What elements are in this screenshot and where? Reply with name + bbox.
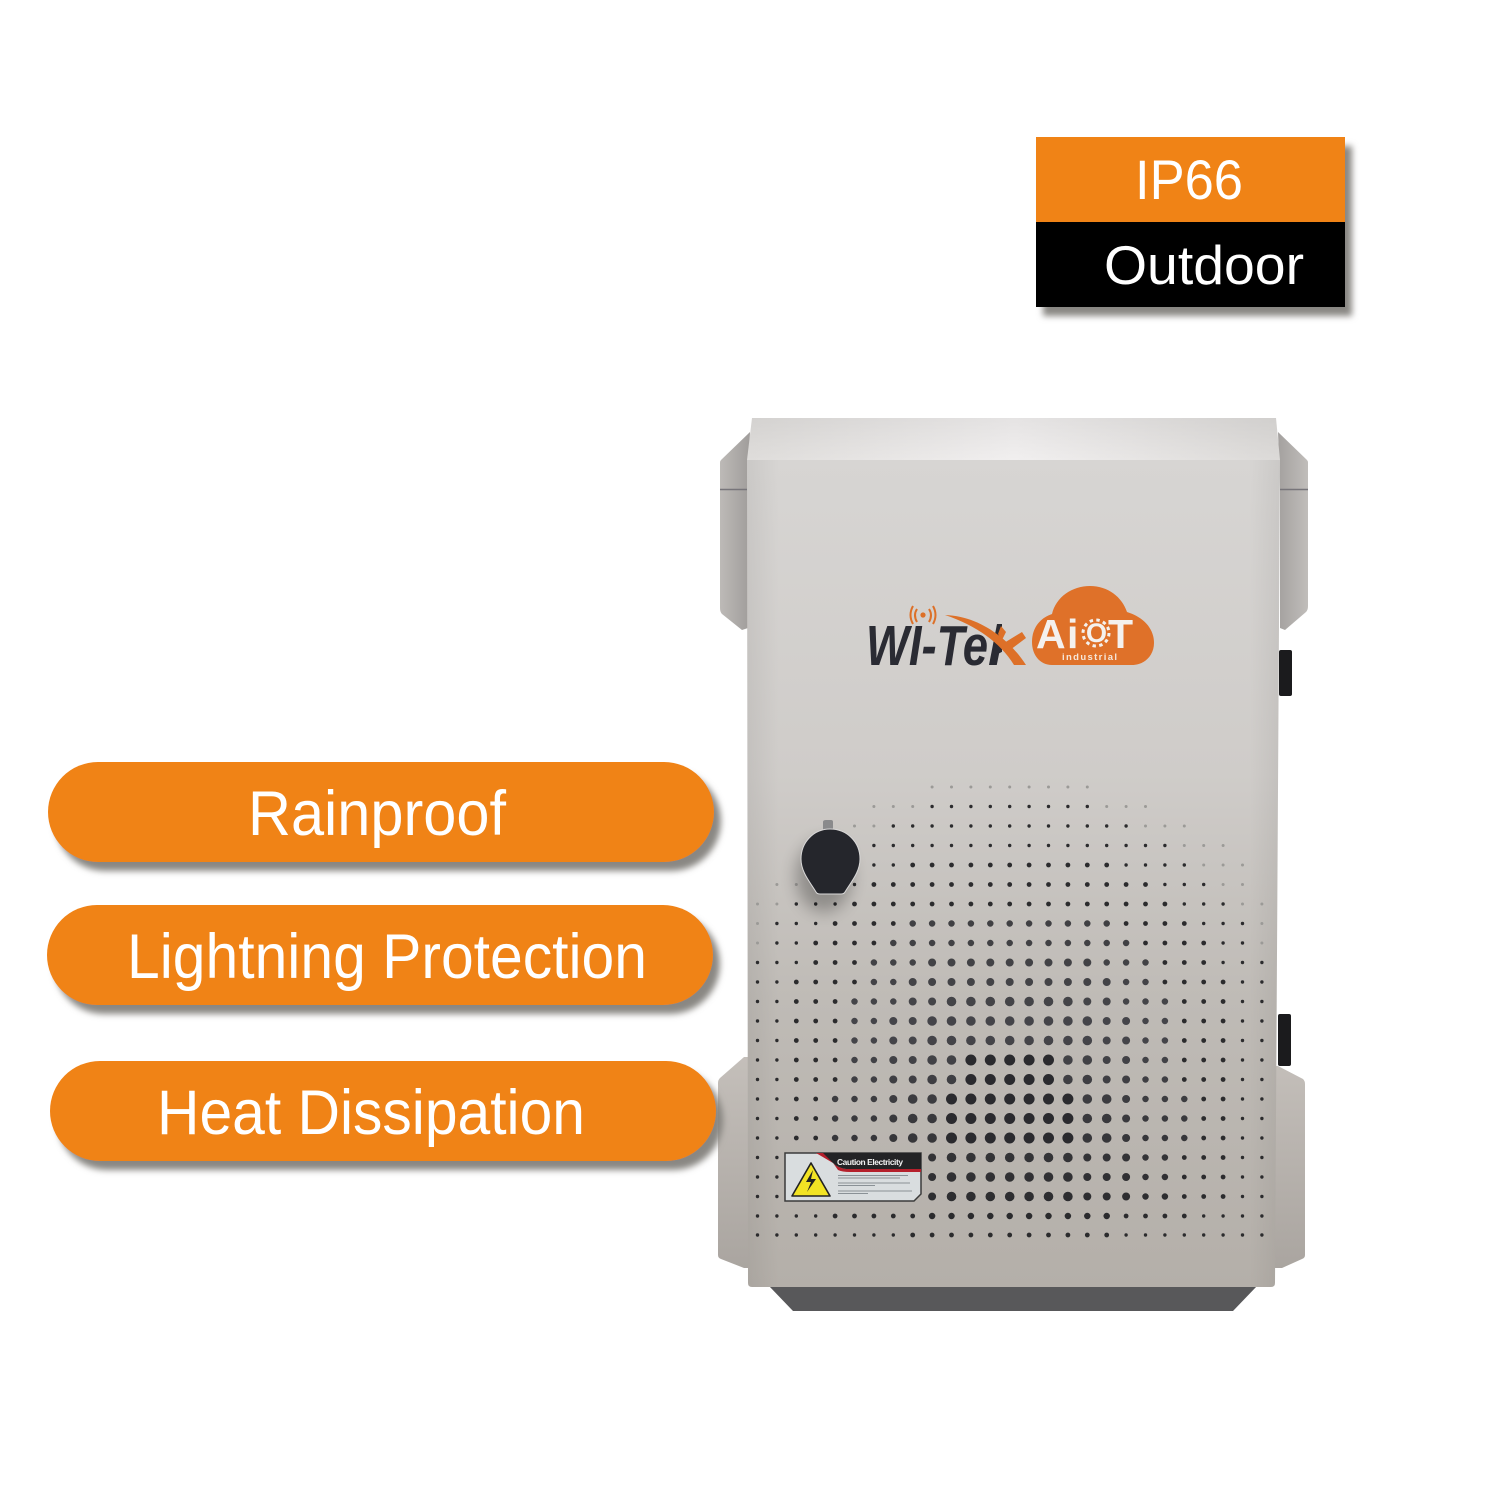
label header band xyxy=(823,1153,921,1169)
warning triangle icon xyxy=(792,1163,830,1196)
knob shadow xyxy=(796,840,852,912)
top bevel xyxy=(747,418,1280,460)
right latch upper xyxy=(1279,650,1292,696)
badge: IP66 / Outdoor xyxy=(1036,137,1345,307)
pill label: Rainproof xyxy=(248,779,506,849)
orange swoosh xyxy=(945,615,1026,665)
cloud shape xyxy=(1032,586,1154,665)
enclosure product illustration xyxy=(718,418,1308,1311)
label red stripe xyxy=(816,1153,921,1172)
bottom-right flange xyxy=(1272,1066,1305,1268)
bottom tray xyxy=(769,1286,1257,1311)
logo: Wi-Tek xyxy=(869,606,1026,666)
enclosure door xyxy=(747,460,1280,1287)
top-right flange xyxy=(1278,432,1308,630)
AiOT text: i xyxy=(1067,611,1078,657)
AiOT text: O xyxy=(1086,618,1107,648)
ventilation dot grid xyxy=(758,787,1262,1235)
wordmark text: WI-Te xyxy=(866,614,988,678)
pill shape xyxy=(50,1061,716,1161)
pill label: Heat Dissipation xyxy=(157,1078,585,1148)
gear teeth around the O xyxy=(1083,620,1109,646)
door lock knob xyxy=(796,820,860,912)
logo: AIoT Industrial cloud xyxy=(1032,586,1154,665)
bottom-left flange xyxy=(718,1057,750,1268)
AiOT text: T xyxy=(1108,611,1133,657)
industrial text: industrial xyxy=(1062,652,1117,663)
antenna signal icon xyxy=(910,606,936,624)
badge label: Outdoor: Outdoor xyxy=(1104,234,1304,296)
knob body xyxy=(801,829,860,894)
label heading text: Caution Electricity xyxy=(837,1157,903,1167)
top-left flange xyxy=(720,432,750,630)
feature pill: Heat Dissipation xyxy=(50,1061,716,1161)
feature pill: Rainproof xyxy=(48,762,714,862)
label fine print xyxy=(838,1176,912,1194)
badge panel with shadow xyxy=(1036,137,1345,307)
AiOT text: A xyxy=(1036,611,1066,657)
pill shape xyxy=(47,905,713,1005)
pill shape xyxy=(48,762,714,862)
warning label: Caution Electricity xyxy=(785,1153,921,1201)
right latch lower xyxy=(1278,1014,1291,1066)
wordmark final letter: k xyxy=(988,614,1023,678)
pill label: Lightning Protection xyxy=(127,922,647,992)
knob tab xyxy=(823,820,833,831)
feature pill: Lightning Protection xyxy=(47,905,713,1005)
badge label: IP66: IP66 xyxy=(1135,148,1243,211)
label plate xyxy=(785,1153,921,1201)
